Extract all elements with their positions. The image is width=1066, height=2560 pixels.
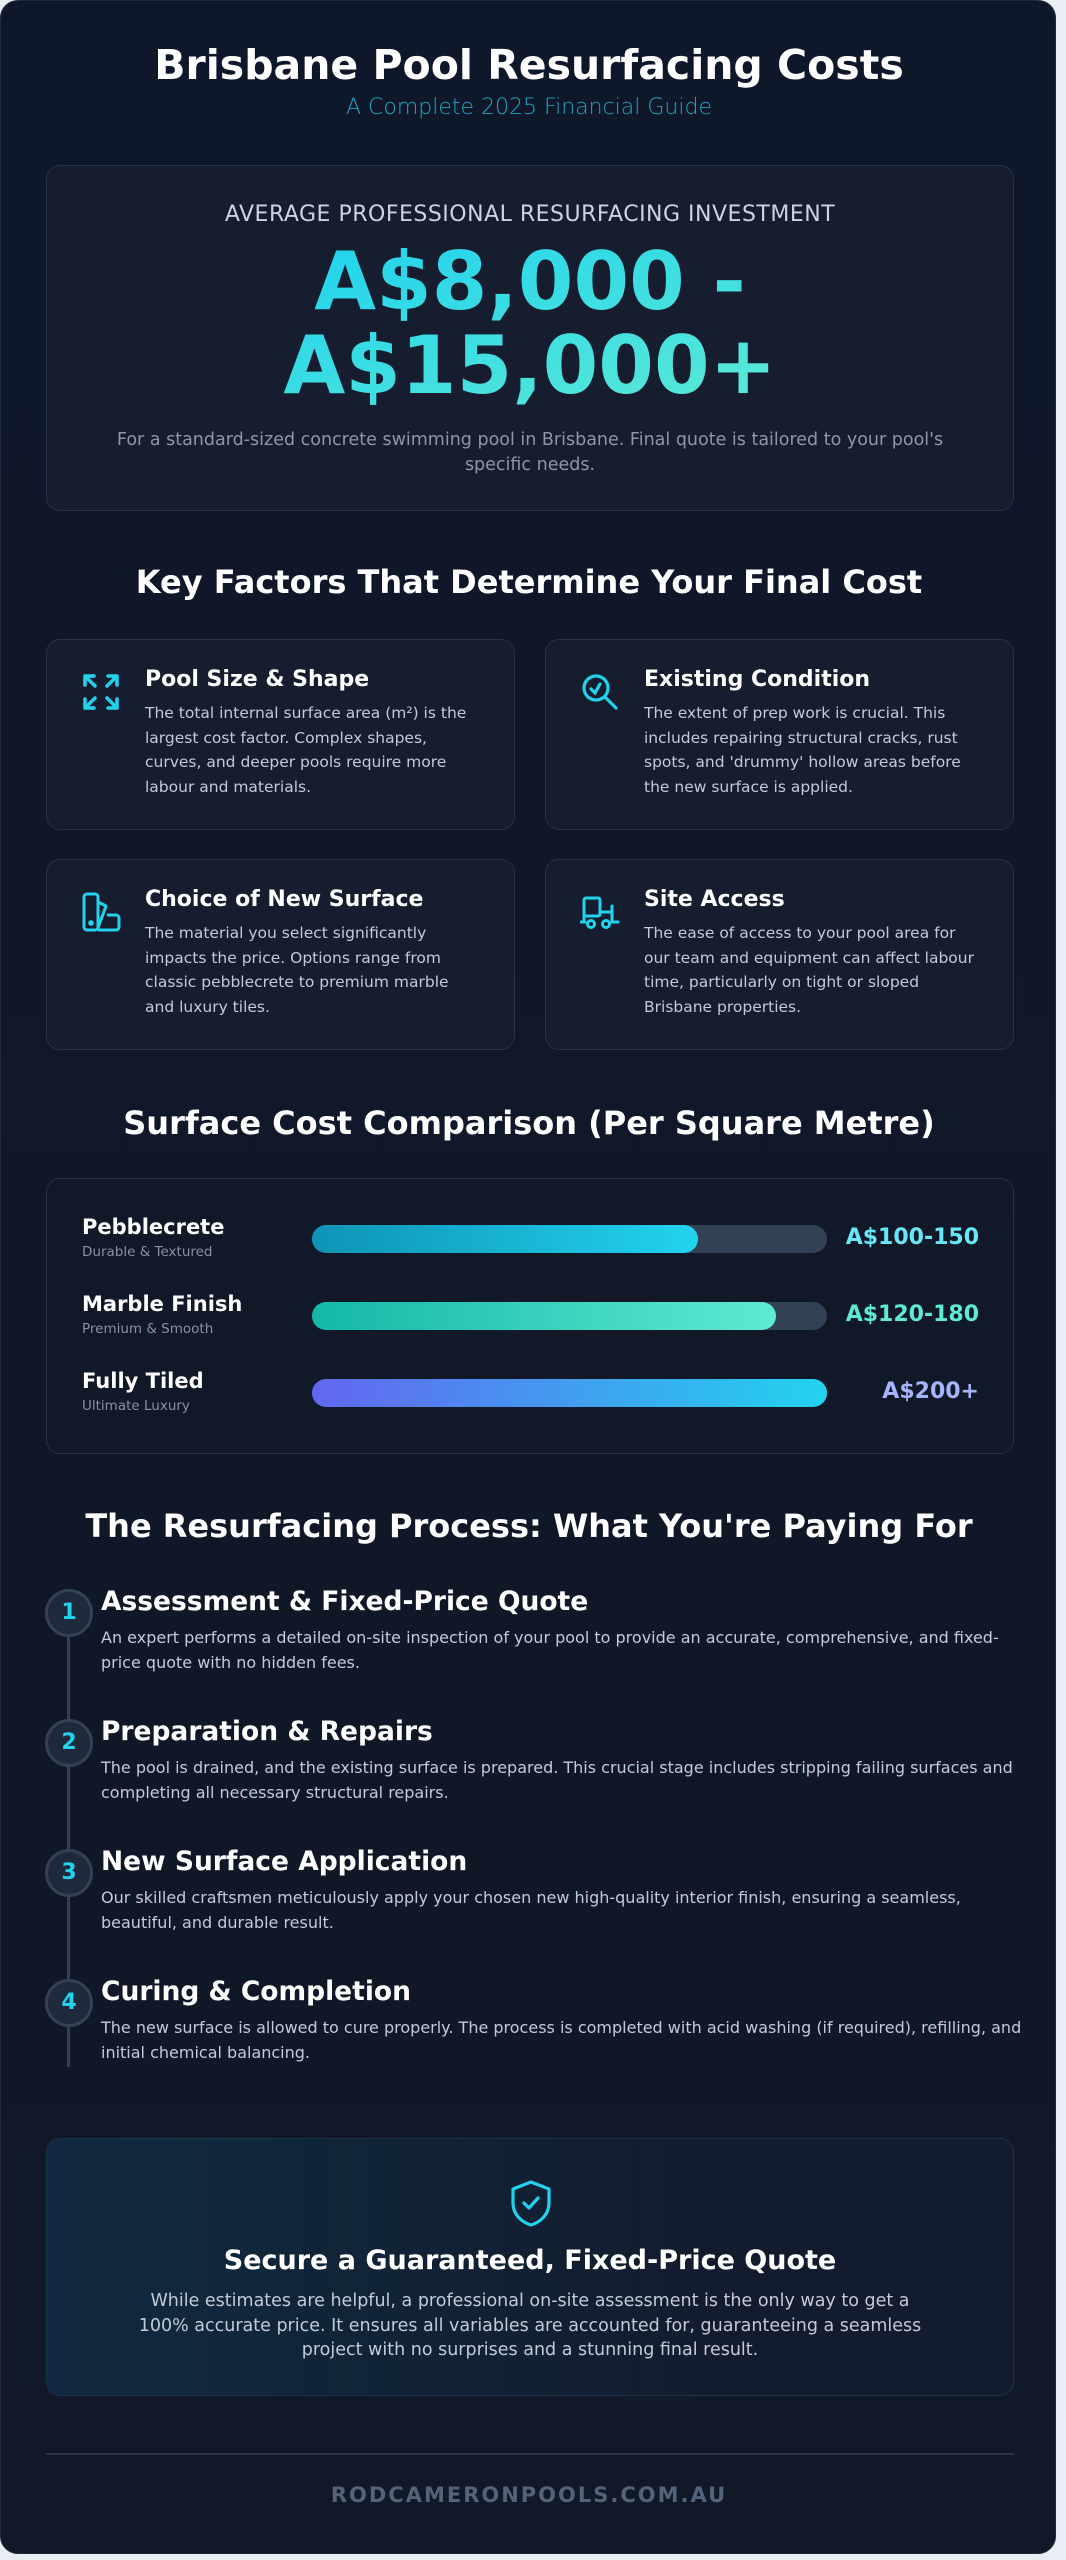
icon: expand arrows: [83, 674, 119, 710]
row: marble: Marble Finish: [82, 1292, 242, 1316]
callout text: While estimates are helpful, a professional on-site assessment is the only way to get a 100% accurate price. It ensures all variables are accounted for, guaranteeing a seamless project with no surprises and a stunning final result.: [139, 2291, 921, 2360]
step 1: [45, 1586, 999, 1672]
row: pebblecrete: A$100-150: [846, 1225, 979, 1250]
timeline: An expert performs a detailed on-site inspection of your pool to provide an accurate, comprehensive, and fixed-price quote with no hidden fees.: [101, 1628, 999, 1672]
panel: surface choice: [46, 859, 515, 1050]
icon: shield check: [511, 2180, 551, 2227]
timeline: Curing & Completion: [101, 1976, 411, 2007]
hero price range: A$15,000+: [283, 319, 777, 412]
heading: process: The Resurfacing Process: What You're Paying For: [85, 1507, 973, 1545]
row: fully tiled: [82, 1369, 979, 1414]
hero price range: A$8,000 -: [314, 235, 746, 328]
hero label: AVERAGE PROFESSIONAL RESURFACING INVESTMENT: [225, 202, 835, 227]
hero price range: [47, 240, 1013, 408]
title: Pool Size & Shape: [145, 667, 369, 692]
row: fully tiled: Fully Tiled: [82, 1369, 204, 1393]
hero note: For a standard-sized concrete swimming pool in Brisbane. Final quote is tailored to your pool's specific needs.: [117, 430, 943, 475]
panel: existing condition: [545, 639, 1014, 830]
timeline: [45, 1586, 1021, 2067]
row: marble: A$120-180: [846, 1302, 979, 1327]
step 3: [45, 1846, 961, 1932]
text: The extent of prep work is crucial. This includes repairing structural cracks, rust spots, and 'drummy' hollow areas before the new surface is applied.: [644, 704, 961, 796]
title: Choice of New Surface: [145, 887, 423, 912]
panel: pool size: [46, 639, 515, 830]
timeline: Our skilled craftsmen meticulously apply your chosen new high-quality interior finish, ensuring a seamless, beautiful, and durable result.: [101, 1888, 961, 1932]
title: Brisbane Pool Resurfacing Costs: [154, 41, 904, 89]
text: The ease of access to your pool area for our team and equipment can affect labour time, particularly on tight or sloped Brisbane properties.: [644, 924, 974, 1016]
row: marble: [82, 1292, 979, 1337]
icon: forklift: [580, 896, 620, 929]
timeline: Assessment & Fixed-Price Quote: [101, 1586, 588, 1617]
row: pebblecrete: Pebblecrete: [82, 1215, 224, 1239]
title: Site Access: [644, 887, 785, 912]
title: Existing Condition: [644, 667, 870, 692]
step 4: [45, 1976, 1021, 2062]
footer: RODCAMERONPOOLS.COM.AU: [331, 2483, 727, 2507]
timeline: Preparation & Repairs: [101, 1716, 433, 1747]
panel: hero price: [46, 165, 1014, 511]
icon: magnifier: [582, 674, 618, 710]
timeline: 4: [61, 1990, 77, 2015]
panel: site access: [545, 859, 1014, 1050]
timeline: New Surface Application: [101, 1846, 467, 1877]
timeline: 2: [61, 1730, 77, 1755]
timeline: The new surface is allowed to cure properly. The process is completed with acid washing (if required), refilling, and initial chemical balancing.: [101, 2018, 1021, 2062]
callout: guaranteed quote: [46, 2138, 1014, 2396]
chart: surface cost bars: [46, 1178, 1014, 1454]
row: pebblecrete: Durable & Textured: [82, 1244, 212, 1260]
heading: surface comparison: Surface Cost Comparison (Per Square Metre): [123, 1104, 935, 1142]
timeline: The pool is drained, and the existing surface is prepared. This crucial stage includes stripping failing surfaces and completing all necessary structural repairs.: [101, 1758, 1013, 1802]
row: pebblecrete: [82, 1215, 979, 1260]
timeline: 1: [61, 1600, 77, 1625]
heading: key factors: Key Factors That Determine Your Final Cost: [136, 563, 922, 601]
row: fully tiled: Ultimate Luxury: [82, 1398, 190, 1414]
subtitle: A Complete 2025 Financial Guide: [346, 95, 712, 120]
step 2: [45, 1716, 1013, 1802]
text: The material you select significantly impacts the price. Options range from classic pebblecrete to premium marble and luxury tiles.: [145, 924, 449, 1016]
text: The total internal surface area (m²) is the largest cost factor. Complex shapes, curves, and deeper pools require more labour and materials.: [145, 704, 466, 796]
icon: swatch: [82, 892, 120, 932]
row: fully tiled: A$200+: [882, 1379, 979, 1404]
timeline: 3: [61, 1860, 77, 1885]
row: marble: Premium & Smooth: [82, 1321, 213, 1337]
callout heading: Secure a Guaranteed, Fixed-Price Quote: [224, 2245, 836, 2276]
